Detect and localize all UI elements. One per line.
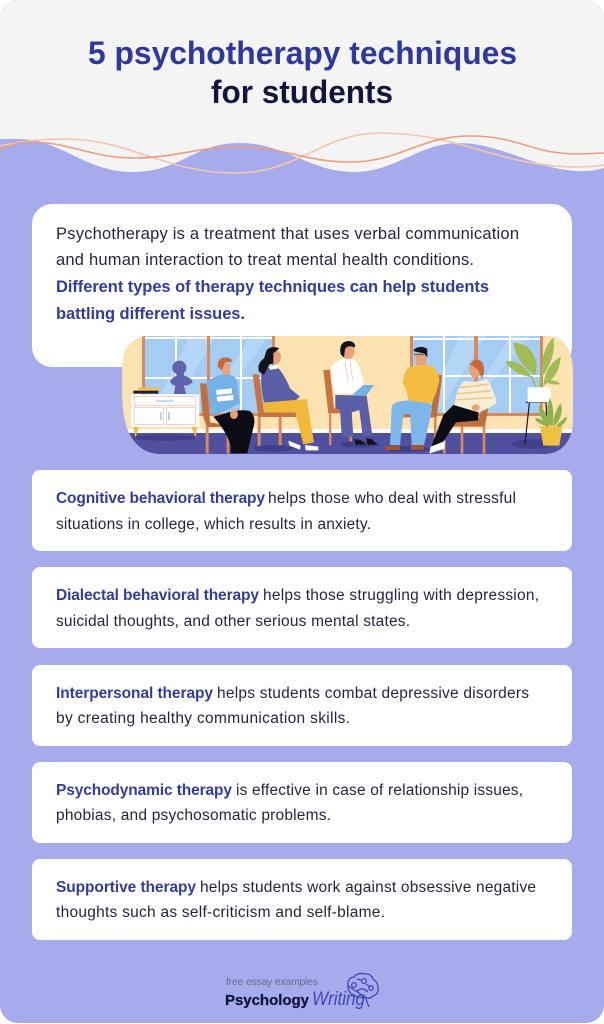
person: woman in purple sweater (253, 347, 318, 452)
card: supportive therapy: Supportive therapy (56, 879, 196, 896)
card: interpersonal therapy: helps students combat depressive disorders (217, 685, 529, 702)
card: cognitive behavioral therapy (32, 470, 572, 551)
card: psychodynamic therapy: is effective in case of relationship issues, (236, 782, 523, 799)
intro text: Psychotherapy is a treatment that uses verbal communication (56, 225, 519, 243)
card: dialectal behavioral therapy: helps those struggling with depression, (263, 587, 539, 604)
left side of scene (131, 347, 318, 454)
person: man in blue shirt (200, 357, 254, 454)
logo: Psychology Writing: free essay examples (226, 976, 318, 988)
panel: introduction (32, 204, 576, 456)
icon: brain (348, 973, 378, 1007)
intro text (56, 225, 519, 323)
person: man in yellow sweater (383, 347, 442, 452)
card: psychodynamic therapy (32, 762, 572, 843)
card: psychodynamic therapy: phobias, and psychosomatic problems. (56, 807, 331, 824)
card: supportive therapy (32, 859, 572, 940)
right side of scene (323, 341, 497, 454)
header wave panel (0, 0, 604, 172)
cabinet with bust and books (131, 361, 199, 441)
card: interpersonal therapy: Interpersonal therapy (56, 685, 213, 702)
title: for students (211, 74, 393, 110)
logo: Psychology Writing: Psychology (225, 992, 310, 1009)
card: psychodynamic therapy: Psychodynamic therapy (56, 782, 232, 799)
card: supportive therapy: thoughts such as self-criticism and self-blame. (56, 904, 385, 921)
title: 5 psychotherapy techniques (88, 35, 517, 71)
person: therapist with clipboard (323, 341, 380, 448)
intro text: and human interaction to treat mental health conditions. (56, 251, 474, 269)
card: supportive therapy: helps students work against obsessive negative (200, 879, 536, 896)
card: dialectal behavioral therapy: Dialectal behavioral therapy (56, 587, 259, 604)
card: dialectal behavioral therapy: suicidal thoughts, and other serious mental states. (56, 613, 410, 630)
illustration: group therapy session (120, 334, 576, 456)
card: cognitive behavioral therapy: helps those who deal with stressful (268, 490, 516, 507)
card: cognitive behavioral therapy: Cognitive behavioral therapy (56, 490, 265, 507)
left window (142, 336, 275, 416)
intro text: Different types of therapy techniques can help students (56, 278, 489, 296)
card: dialectal behavioral therapy (32, 567, 572, 648)
decorative wave lines (0, 133, 604, 173)
logo: Psychology Writing (225, 973, 378, 1010)
card: interpersonal therapy: by creating healthy communication skills. (56, 710, 350, 727)
potted plants (505, 337, 567, 449)
right window (410, 336, 543, 416)
logo: Psychology Writing: Writing (312, 989, 365, 1010)
card: cognitive behavioral therapy: situations in college, which results in anxiety. (56, 516, 371, 533)
person: woman in striped sweater (429, 359, 497, 454)
card: interpersonal therapy (32, 665, 572, 746)
floor (120, 429, 576, 456)
title (88, 35, 517, 110)
intro text: battling different issues. (56, 305, 245, 323)
